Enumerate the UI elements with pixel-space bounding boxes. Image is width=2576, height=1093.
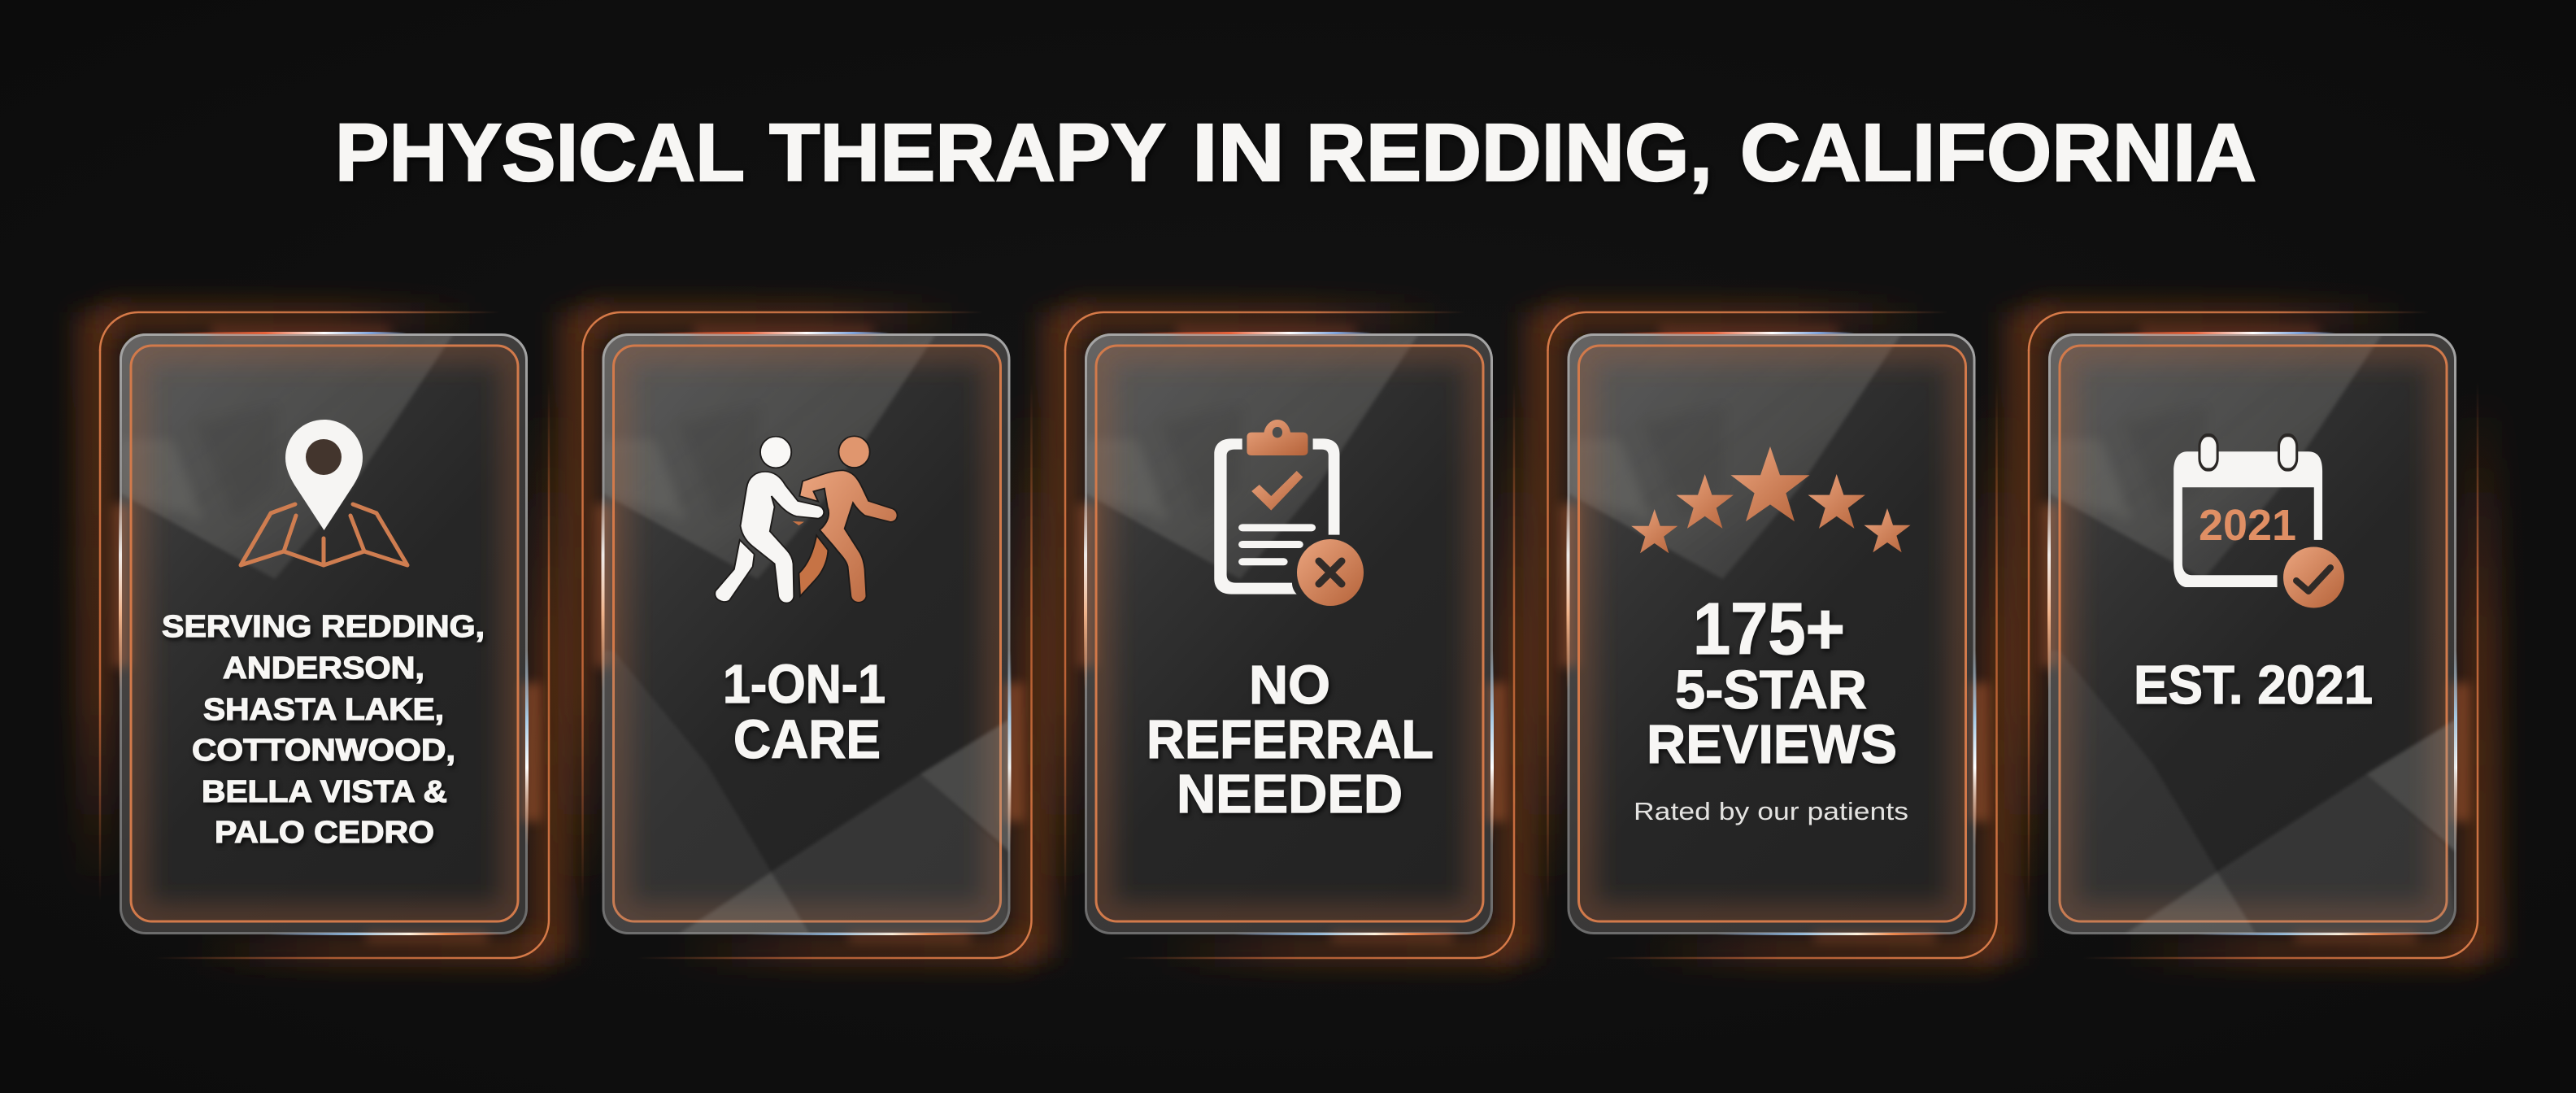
panel: reviews [1524,303,2021,967]
text: 1-on-1 care: CARE [733,709,881,770]
text: no referral needed: NEEDED [1177,764,1403,825]
icon: therapist assisting patient [715,436,898,603]
text: service locations: BELLA VISTA & [202,775,447,809]
text: review count: 175+ [1693,589,1845,670]
text: 1-on-1 care: 1-ON-1 [723,654,886,715]
title: IN [1192,107,1285,198]
icon: calendar with check badge [2174,435,2344,608]
text: no referral needed: REFERRAL [1147,709,1434,770]
text: service locations: PALO CEDRO [215,816,434,850]
panel: 1-on-1 care [558,303,1055,967]
title: PHYSICAL [335,107,745,198]
text: service locations: COTTONWOOD, [192,734,455,768]
text: service locations [162,610,485,850]
text: review count: REVIEWS [1647,714,1897,775]
text: review count [1647,589,1897,775]
title: CALIFORNIA [1740,107,2256,198]
title [335,107,2256,198]
title: REDDING, [1306,107,1712,198]
panel: established [2004,303,2502,967]
title: THERAPY [769,107,1166,198]
text: no referral needed: NO [1249,655,1330,716]
text: service locations: ANDERSON, [223,651,424,686]
panel: service area [76,303,573,967]
panel: no referral needed [1041,303,1538,967]
text: service locations: SERVING REDDING, [162,610,485,644]
text: calendar year: 2021 [2199,501,2296,550]
icon: clipboard with x badge [1214,420,1364,606]
text: 1-on-1 care [723,654,886,770]
text: service locations: SHASTA LAKE, [203,693,444,727]
text: no referral needed [1147,655,1434,825]
text: est. 2021: EST. 2021 [2134,655,2373,716]
text: review count: 5-STAR [1675,660,1867,721]
icon: location pin on map [241,420,407,565]
icon: five stars [1631,446,1911,553]
text: rated by our patients: Rated by our patients [1634,797,1908,825]
